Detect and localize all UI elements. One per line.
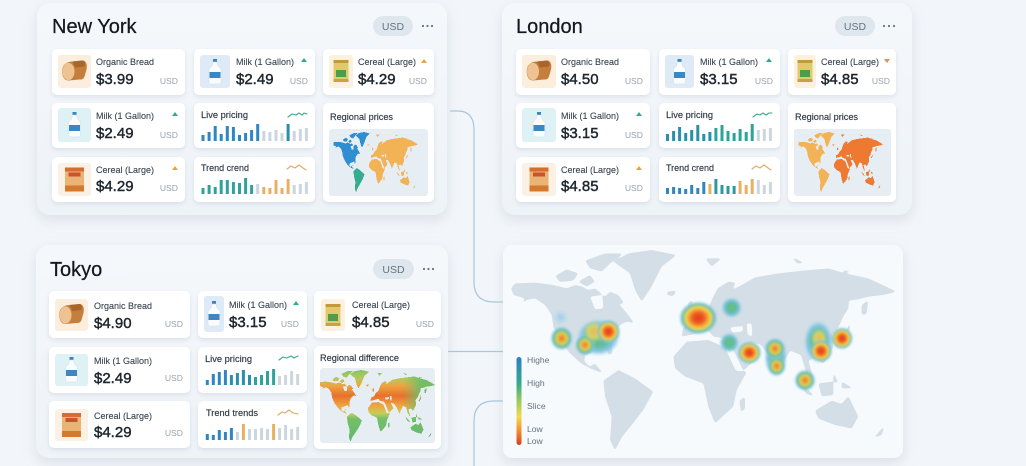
currency pill [835,16,875,36]
card: Milk top: Milk (1 Gallon) [700,57,758,68]
connector: heat map to next panel [474,401,503,466]
card: Cereal bottom [516,157,650,202]
chart: Live pricing: Live pricing [666,109,713,120]
card: Cereal bottom: $4.29 [96,178,134,195]
panel: New York [37,3,447,215]
card: Cereal top: USD [409,76,427,86]
menu dots [883,25,895,27]
chart: Trend trends: Trend trends [206,407,258,418]
card: Regional prices map [323,103,434,202]
card: Cereal bottom [52,157,185,202]
card: Cereal top: Cereal (Large) [358,57,416,68]
currency pill: USD [382,264,405,276]
chart: Trend crend [659,157,780,202]
card: Milk middle: Milk (1 Gallon) [96,111,154,122]
card: Milk middle: Milk (1 Gallon) [561,111,619,122]
legend [516,355,550,446]
card: Milk middle: USD [625,130,643,140]
card: Milk middle [49,347,190,393]
card: Organic Bread [516,49,650,95]
legend: Slice [527,401,546,411]
legend: Low [527,436,544,446]
currency pill [373,259,414,279]
card: Cereal bottom: $4.85 [561,178,599,195]
card: Milk top [198,291,307,338]
currency pill [373,16,413,36]
card: Cereal top: USD [872,76,890,86]
card: Organic Bread [52,49,185,95]
menu dots [422,25,433,27]
card: Regional difference map: Regional difference [320,352,399,363]
panel: world heat map [503,245,903,458]
card: Milk middle: $2.49 [96,125,134,142]
card: Cereal top: Cereal (Large) [821,57,879,68]
card: Cereal bottom [49,401,190,448]
card: Cereal top [323,49,434,95]
card: Organic Bread: USD [160,76,178,86]
card: Organic Bread: Organic Bread [94,301,152,312]
card: Cereal bottom: USD [160,183,178,193]
connector: London and New York to heat map [450,111,503,302]
card: Cereal bottom: Cereal (Large) [94,411,152,422]
card: Cereal bottom: Cereal (Large) [96,165,154,176]
card: Organic Bread: $4.90 [94,315,132,332]
chart: Trend crend [194,157,315,202]
card: Regional prices map: Regional prices [795,111,858,122]
chart: Trend crend: Trend crend [201,162,249,173]
card: Cereal top: USD [416,319,434,329]
chart: Live pricing [194,103,315,148]
card: Cereal top: $4.85 [821,71,859,88]
currency pill: USD [382,21,405,33]
card: Milk top: $3.15 [229,314,267,331]
card: Organic Bread: $3.99 [96,71,134,88]
currency pill: USD [844,21,867,33]
chart: Trend trends [198,401,307,448]
card: Milk middle [516,103,650,148]
card: Milk middle: USD [165,373,183,383]
card: Milk top: Milk (1 Gallon) [229,300,287,311]
card: Organic Bread: USD [625,76,643,86]
card: Organic Bread: USD [165,319,183,329]
card: Milk top: USD [290,76,308,86]
card: Regional difference map [314,346,441,449]
chart: Trend crend: Trend crend [666,162,714,173]
card: Organic Bread [49,291,190,338]
card: Milk top [194,49,315,95]
card: Milk top: Milk (1 Gallon) [236,57,294,68]
card: Milk top: USD [755,76,773,86]
panel: Tokyo [36,245,448,458]
connector: Tokyo to heat map [448,350,503,352]
heading: London: London [516,16,583,38]
panel: London [502,3,912,215]
world map land [511,250,897,451]
card: Cereal bottom: USD [165,428,183,438]
card: Milk top: USD [281,319,299,329]
card: Milk middle: USD [160,130,178,140]
card: Organic Bread: $4.50 [561,71,599,88]
card: Milk middle: Milk (1 Gallon) [94,356,152,367]
chart: Live pricing [659,103,780,148]
card: Cereal top: $4.85 [352,314,390,331]
card: Milk top: $3.15 [700,71,738,88]
card: Regional prices map: Regional prices [330,111,393,122]
card: Milk middle [52,103,185,148]
card: Cereal bottom: $4.29 [94,424,132,441]
card: Milk top: $2.49 [236,71,274,88]
card: Milk top [659,49,780,95]
heading: New York: New York [52,16,137,38]
heat spots [550,297,853,391]
card: Cereal top: $4.29 [358,71,396,88]
heading: Tokyo: Tokyo [50,259,102,281]
menu dots [423,268,434,270]
legend: Low [527,424,544,434]
card: Milk middle: $2.49 [94,370,132,387]
card: Cereal bottom: Cereal (Large) [561,165,619,176]
chart: Live pricing: Live pricing [201,109,248,120]
card: Organic Bread: Organic Bread [561,57,619,68]
card: Cereal bottom: USD [625,183,643,193]
card: Organic Bread: Organic Bread [96,57,154,68]
chart: Live pricing: Live pricing [205,353,252,364]
card: Cereal top [314,291,441,338]
card: Cereal top: Cereal (Large) [352,300,410,311]
card: Milk middle: $3.15 [561,125,599,142]
chart: Live pricing [198,347,307,393]
legend: High [527,378,545,388]
card: Regional prices map [788,103,896,202]
card: Cereal top [788,49,896,95]
legend: Highe [527,355,550,365]
